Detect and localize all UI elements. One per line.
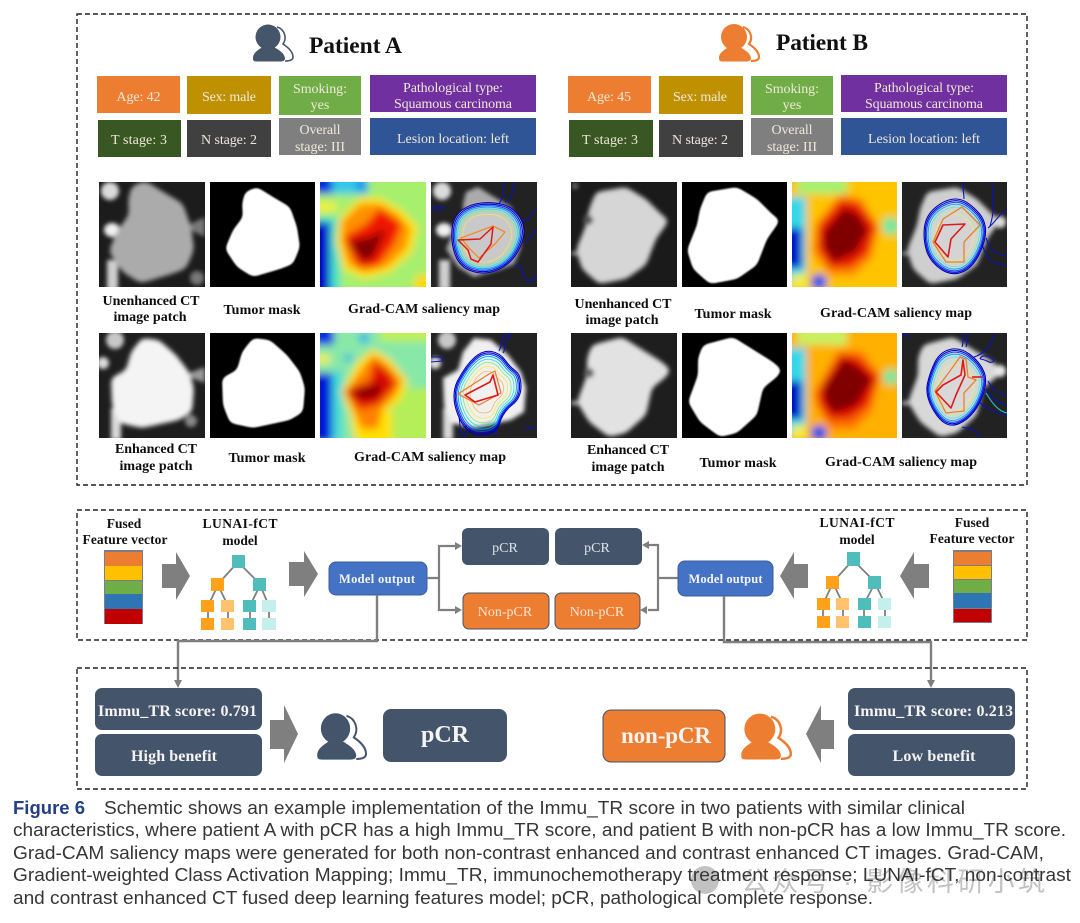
chart: patient A unenhanced Grad-CAM heatmap xyxy=(320,182,426,287)
box: high benefit xyxy=(95,734,262,776)
box: patient A score xyxy=(95,688,262,730)
image: patient B unenhanced CT patch xyxy=(571,182,677,287)
image: patient B unenhanced tumor mask xyxy=(682,182,787,287)
clinical tiles: patient B: yes xyxy=(783,98,801,113)
clinical tiles: patient A: T stage: 3 xyxy=(111,133,167,148)
heading: right fused feature vector: Fused xyxy=(955,515,990,530)
clinical tiles: patient B xyxy=(568,75,1007,157)
image: patient A enhanced CT patch xyxy=(99,333,205,438)
icon: left decision tree xyxy=(201,555,276,630)
heading: left fused feature vector: Fused xyxy=(107,516,142,531)
caption: and contrast enhanced CT fused deep learning features model; pCR, pathological complete response. xyxy=(13,888,873,908)
clinical tiles: patient A: Squamous carcinoma xyxy=(394,97,513,112)
panel: model pipeline xyxy=(77,510,1027,640)
heading: left LUNAI-fCT model xyxy=(202,516,278,548)
image: patient A enhanced tumor mask xyxy=(210,333,315,438)
arrow: vector to model left xyxy=(162,552,190,600)
clinical tiles: patient B: Squamous carcinoma xyxy=(865,97,984,112)
clinical tiles: patient B: Age: 45 xyxy=(587,90,631,105)
box: patient A score: Immu_TR score: 0.791 xyxy=(98,703,257,720)
clinical tiles: patient A xyxy=(97,75,536,157)
caption: Schemtic shows an example implementation of the Immu_TR score in two patients with similar clinical xyxy=(104,798,965,819)
heading: right LUNAI-fCT model: model xyxy=(839,532,875,547)
image captions: patient B: Tumor mask xyxy=(694,307,772,322)
box: left model output xyxy=(329,562,427,595)
clinical tiles: patient B: N stage: 2 xyxy=(672,133,728,148)
connector: right output to score xyxy=(724,596,935,688)
chart: patient A unenhanced Grad-CAM contour overlay xyxy=(431,182,537,287)
chart: patient A enhanced Grad-CAM contour overlay xyxy=(431,333,537,438)
image captions: patient B xyxy=(574,297,977,475)
chart: patient A enhanced Grad-CAM heatmap xyxy=(320,333,426,438)
box: pCR result xyxy=(383,709,507,762)
panel: score results xyxy=(77,668,1027,789)
watermark: 公众号 · 影像科研小筑 xyxy=(741,867,1045,897)
box: left Non-pCR xyxy=(463,593,549,629)
clinical tiles: patient B: Pathological type: xyxy=(874,81,974,96)
heading: right fused feature vector: Feature vector xyxy=(930,531,1014,546)
heading: right LUNAI-fCT model xyxy=(820,515,894,547)
clinical tiles: patient A: Sex: male xyxy=(202,90,256,105)
icon: patient A person xyxy=(253,24,293,62)
arrow: model to output right xyxy=(780,552,808,599)
box: left model output: Model output xyxy=(339,572,416,586)
image captions: patient B: Grad-CAM saliency map xyxy=(820,306,972,321)
heading: right LUNAI-fCT model: LUNAI-fCT xyxy=(820,515,894,530)
clinical tiles: patient A: Lesion location: left xyxy=(397,132,509,147)
box: left pCR xyxy=(462,528,549,565)
icon: patient A result person xyxy=(317,713,366,760)
clinical tiles: patient B: Lesion location: left xyxy=(868,132,980,147)
clinical tiles: patient B: Sex: male xyxy=(673,90,727,105)
clinical tiles: patient A: Smoking: xyxy=(293,82,347,97)
clinical tiles: patient A: Overall xyxy=(300,123,341,138)
box: right pCR: pCR xyxy=(584,541,610,556)
box: high benefit: High benefit xyxy=(131,748,218,765)
arrow: patient A result xyxy=(270,705,298,763)
image captions: patient A: Enhanced CT xyxy=(115,442,198,457)
image captions: patient B: Grad-CAM saliency map xyxy=(825,455,977,470)
panel: patient CT imaging and clinical characteristics xyxy=(77,14,1027,485)
icon: patient B result person xyxy=(741,714,791,760)
arrows: right output branches xyxy=(640,541,678,614)
chart: patient B unenhanced Grad-CAM contour overlay xyxy=(902,182,1007,287)
heading: Patient B: Patient B xyxy=(776,30,868,56)
image captions: patient A: Grad-CAM saliency map xyxy=(348,302,500,317)
icon: patient B person xyxy=(719,24,759,62)
image captions: patient B: Tumor mask xyxy=(700,456,777,471)
box: left Non-pCR: Non-pCR xyxy=(478,605,533,620)
heading: left fused feature vector: Feature vector xyxy=(82,532,168,547)
chart: patient B unenhanced Grad-CAM heatmap xyxy=(792,182,897,287)
caption: Grad-CAM saliency maps were generated for both non-contrast enhanced and contrast enhanced CT images. Grad-CAM, xyxy=(13,843,1044,863)
box: right model output xyxy=(678,561,773,596)
feature vector stack: right xyxy=(953,550,992,623)
connector: left output to score xyxy=(174,595,377,688)
image: patient B enhanced CT patch xyxy=(571,333,677,438)
box: right pCR xyxy=(555,528,642,565)
image: patient A unenhanced tumor mask xyxy=(210,182,315,287)
caption: Figure 6 xyxy=(13,798,85,818)
arrow: vector to model right xyxy=(900,552,929,599)
clinical tiles: patient B: Overall xyxy=(772,123,813,138)
image: patient A unenhanced CT patch xyxy=(99,182,205,287)
image captions: patient A: Grad-CAM saliency map xyxy=(354,450,506,465)
heading: Patient A: Patient A xyxy=(309,33,402,59)
image captions: patient A xyxy=(102,294,506,474)
caption xyxy=(13,798,1071,908)
box: non-pCR result: non-pCR xyxy=(621,723,711,748)
heading: right fused feature vector xyxy=(930,515,1014,546)
image captions: patient B: Enhanced CT xyxy=(587,443,670,458)
heading: left LUNAI-fCT model: model xyxy=(222,533,258,548)
arrow: patient B result xyxy=(806,705,834,763)
clinical tiles: patient A: N stage: 2 xyxy=(201,133,257,148)
box: right Non-pCR xyxy=(555,593,640,629)
box: patient B score: Immu_TR score: 0.213 xyxy=(854,703,1013,720)
image: patient B enhanced tumor mask xyxy=(682,333,787,438)
clinical tiles: patient A: yes xyxy=(311,98,329,113)
clinical tiles: patient B: T stage: 3 xyxy=(582,133,638,148)
clinical tiles: patient A: Pathological type: xyxy=(403,81,503,96)
clinical tiles: patient B: Smoking: xyxy=(765,82,819,97)
box: patient B score xyxy=(848,688,1015,730)
chart: patient B enhanced Grad-CAM heatmap xyxy=(792,333,897,438)
heading: left LUNAI-fCT model: LUNAI-fCT xyxy=(202,516,278,531)
box: right model output: Model output xyxy=(688,572,763,586)
box: low benefit: Low benefit xyxy=(892,748,976,765)
chart: patient B enhanced Grad-CAM contour overlay xyxy=(902,333,1007,438)
image captions: patient B: image patch xyxy=(586,313,659,328)
clinical tiles: patient A: stage: III xyxy=(295,140,345,155)
box: right Non-pCR: Non-pCR xyxy=(570,605,625,620)
caption: characteristics, where patient A with pCR has a high Immu_TR score, and patient B with non-pCR has a low Immu_TR score. xyxy=(13,820,1066,841)
box: pCR result: pCR xyxy=(421,722,470,748)
icon: right decision tree xyxy=(817,552,891,628)
clinical tiles: patient B: stage: III xyxy=(767,140,817,155)
arrow: model to output left xyxy=(289,551,318,597)
box: non-pCR result xyxy=(603,710,725,762)
image captions: patient A: Tumor mask xyxy=(228,451,306,466)
image captions: patient A: Unenhanced CT xyxy=(102,294,200,309)
arrows: left output branches xyxy=(427,542,462,614)
clinical tiles: patient A: Age: 42 xyxy=(116,90,160,105)
box: low benefit xyxy=(848,734,1015,776)
image captions: patient A: image patch xyxy=(120,459,193,474)
image captions: patient B: Unenhanced CT xyxy=(574,297,672,312)
image captions: patient B: image patch xyxy=(592,460,665,475)
image captions: patient A: Tumor mask xyxy=(224,303,301,318)
caption: Gradient-weighted Class Activation Mapping; Immu_TR, immunochemotherapy treatment response; LUNAI-fCT, non-contrast xyxy=(13,865,1071,886)
box: left pCR: pCR xyxy=(492,541,518,556)
feature vector stack: left xyxy=(104,550,143,624)
heading: left fused feature vector xyxy=(82,516,168,547)
image captions: patient A: image patch xyxy=(114,310,187,325)
